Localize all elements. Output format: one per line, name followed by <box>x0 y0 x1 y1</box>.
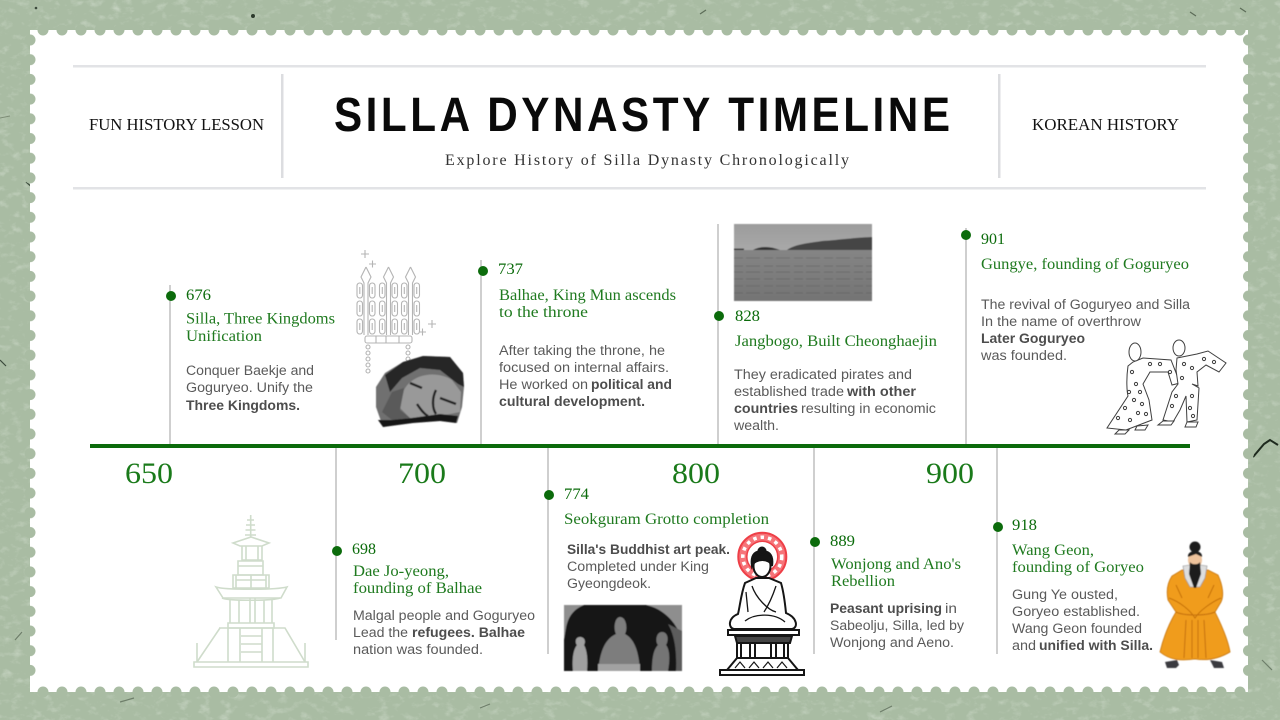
header panel <box>73 65 1206 190</box>
photo: Cheonghaejin sea <box>734 224 872 301</box>
left header label: FUN HISTORY LESSON <box>89 115 264 134</box>
decade label: 700: 700 <box>398 457 446 490</box>
decade label: 650: 650 <box>125 457 173 490</box>
event: 676: Unification <box>186 328 262 345</box>
event: 918: founding of Goryeo <box>1012 559 1144 576</box>
event: 918 <box>993 517 1153 653</box>
event: 676: Goguryeo. Unify the <box>186 380 313 395</box>
event: 774: Seokguram Grotto completion <box>564 511 769 528</box>
event: 737: to the throne <box>499 304 588 321</box>
event: 889: Sabeolju, Silla, led by <box>830 618 964 633</box>
event: 774: Gyeongdeok. <box>567 576 651 591</box>
icon: dancers from Goguryeo mural <box>1107 340 1226 434</box>
icon: stone roof tile face <box>376 356 464 427</box>
event: 901: 901 <box>981 231 1005 248</box>
event: 698: nation was founded. <box>353 642 483 657</box>
event: 901: In the name of overthrow <box>981 314 1141 329</box>
event: 889: in <box>945 601 957 616</box>
event: 889: 889 <box>830 533 855 550</box>
event: 828: established trade <box>734 384 844 399</box>
event: 774: 774 <box>564 486 589 503</box>
event: 774 <box>544 486 769 591</box>
event: 828 <box>714 308 937 433</box>
female dancer <box>1107 343 1180 434</box>
photo: Seokguram grotto <box>564 605 682 671</box>
event: 828: with other <box>846 384 917 399</box>
event: 889: Wonjong and Aeno. <box>830 635 954 650</box>
event: 698: Lead the <box>353 625 408 640</box>
event: 698 <box>332 541 535 657</box>
event: 828: They eradicated pirates and <box>734 367 912 382</box>
event: 737 <box>478 261 676 409</box>
event: 918: Goryeo established. <box>1012 604 1140 619</box>
event: 828: Jangbogo, Built Cheonghaejin <box>735 333 937 350</box>
event: 828: countries <box>734 401 798 416</box>
event: 698: Dae Jo-yeong, <box>353 563 449 580</box>
icon: King Wang Geon in orange robe <box>1160 542 1230 668</box>
event: 918: unified with Silla. <box>1039 638 1153 653</box>
event: 828: 828 <box>735 308 760 325</box>
event: 828: wealth. <box>733 418 779 433</box>
subtitle: Explore History of Silla Dynasty Chronologically <box>445 152 849 169</box>
male dancer <box>1158 340 1226 427</box>
event: 774: Silla's Buddhist art peak. <box>567 542 730 557</box>
event: 918: and <box>1012 638 1036 653</box>
event: 737: After taking the throne, he <box>499 343 665 358</box>
event: 918: Wang Geon founded <box>1012 621 1142 636</box>
event: 676: Three Kingdoms. <box>186 398 300 413</box>
icon: gold crown <box>357 250 436 373</box>
event: 737: cultural development. <box>499 394 645 409</box>
event: 889: Peasant uprising <box>830 601 942 616</box>
event: 698: refugees. Balhae <box>412 625 526 640</box>
event: 918: Gung Ye ousted, <box>1012 587 1118 602</box>
timeline axis <box>90 224 1190 654</box>
event: 889: Wonjong and Ano's <box>831 556 961 573</box>
event: 889: Rebellion <box>831 573 895 590</box>
event: 737: He worked on <box>499 377 588 392</box>
event: 774: Completed under King <box>567 559 709 574</box>
right header label: KOREAN HISTORY <box>1032 115 1179 134</box>
event: 698: Malgal people and Goguryeo <box>353 608 535 623</box>
event: 737: Balhae, King Mun ascends <box>499 287 676 304</box>
event: 676 <box>166 287 335 413</box>
decade label: 900: 900 <box>926 457 974 490</box>
icon: Dabotap pagoda <box>194 515 308 667</box>
event: 676: 676 <box>186 287 211 304</box>
event: 901: Gungye, founding of Goguryeo <box>981 256 1189 273</box>
event: 901: was founded. <box>980 348 1067 363</box>
icon: seated Buddha on pedestal <box>720 533 804 675</box>
event: 901: Later Goguryeo <box>981 331 1085 346</box>
event: 918: Wang Geon, <box>1012 542 1094 559</box>
event: 828: resulting in economic <box>801 401 936 416</box>
event: 737: 737 <box>498 261 523 278</box>
event: 901 <box>961 230 1191 363</box>
event: 901: The revival of Goguryeo and Silla <box>981 297 1191 312</box>
event: 698: founding of Balhae <box>353 580 482 597</box>
event: 918: 918 <box>1012 517 1037 534</box>
decade label: 800: 800 <box>672 457 720 490</box>
event: 737: focused on internal affairs. <box>499 360 669 375</box>
event: 737: political and <box>591 377 672 392</box>
event: 698: 698 <box>352 541 376 558</box>
event: 889 <box>810 533 964 650</box>
event: 676: Conquer Baekje and <box>186 363 314 378</box>
title: SILLA DYNASTY TIMELINE <box>334 87 950 142</box>
event: 676: Silla, Three Kingdoms <box>186 310 335 328</box>
